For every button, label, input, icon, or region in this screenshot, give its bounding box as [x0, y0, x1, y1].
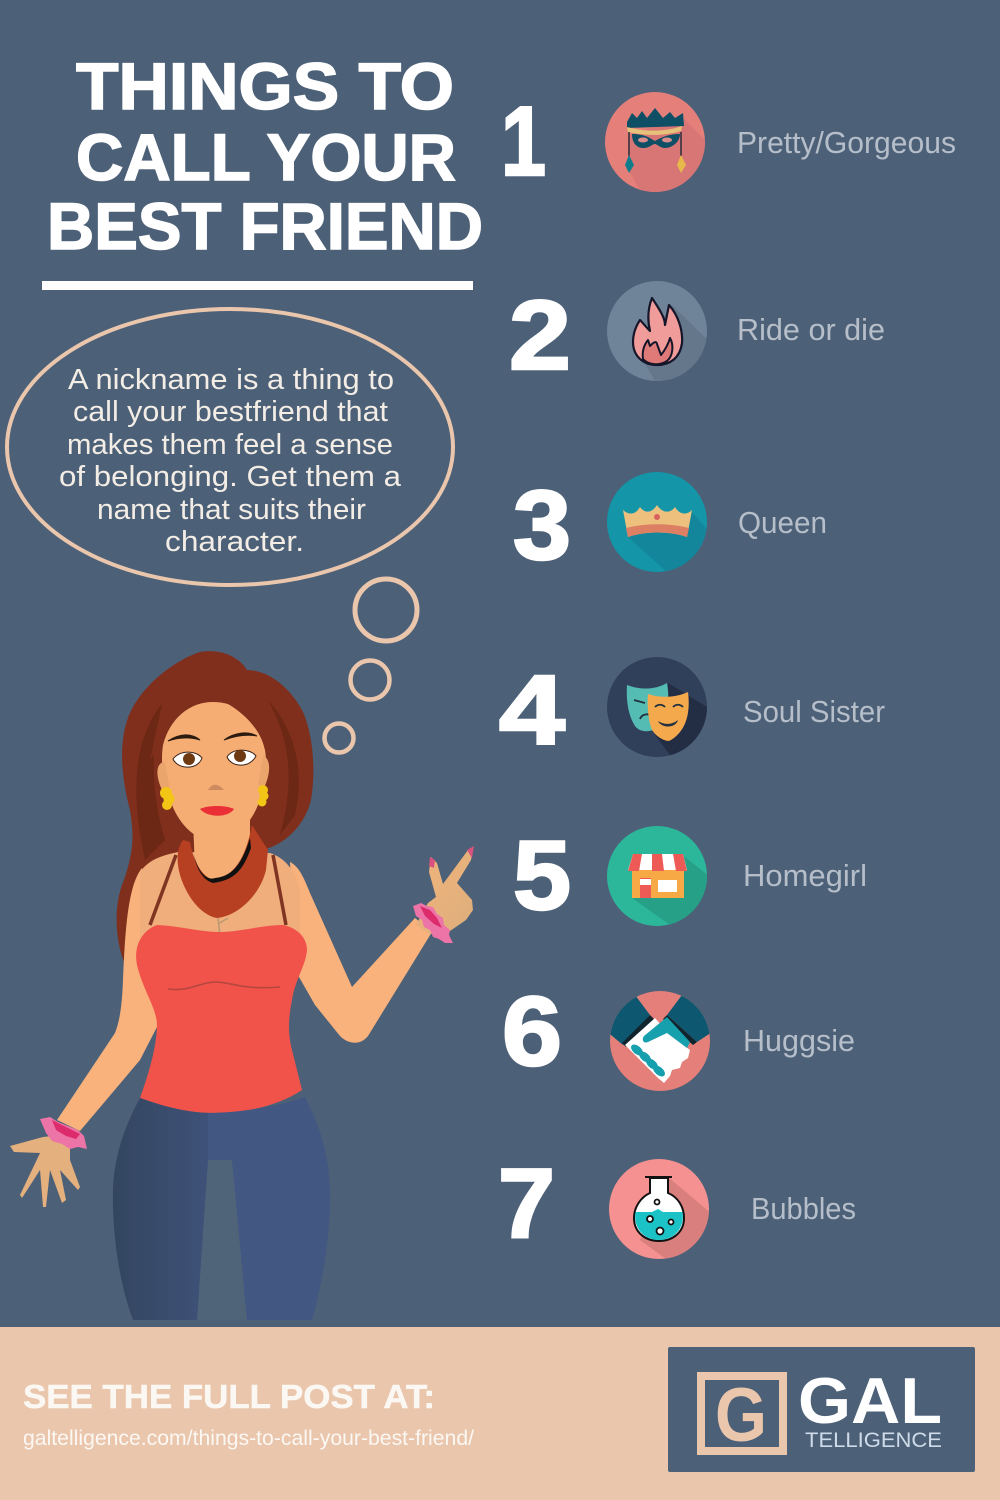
icon: flask: [609, 1159, 709, 1259]
label: Pretty/Gorgeous: [737, 125, 956, 160]
item 3: [514, 472, 826, 572]
left hand: [10, 1135, 80, 1207]
item 5: 5: [513, 820, 571, 930]
item 2: [511, 281, 884, 381]
label: Ride or die: [737, 312, 885, 347]
logo: [668, 1347, 975, 1472]
brows: [168, 733, 257, 741]
neck: [193, 820, 250, 885]
leg gap: [197, 1160, 247, 1320]
right arm: [290, 862, 432, 1043]
right hand: [416, 848, 473, 934]
scrunchie right: [413, 903, 453, 943]
item 3: 3: [513, 470, 571, 580]
straps: [150, 855, 286, 925]
title: THINGS TO: [76, 49, 454, 123]
pants: [113, 1098, 213, 1320]
title underline: [42, 281, 473, 290]
item 4: [499, 657, 885, 757]
icon: shop: [607, 826, 707, 926]
icon: flame: [607, 281, 707, 381]
item 4: 4: [499, 655, 565, 765]
label: Bubbles: [751, 1191, 856, 1226]
footer url: galtelligence.com/things-to-call-your-best-friend/: [23, 1427, 474, 1450]
logo: GAL: [798, 1364, 942, 1437]
left arm: [57, 868, 158, 1131]
label: Soul Sister: [743, 694, 885, 729]
item 6: 6: [502, 976, 562, 1086]
thought bubble with intro text: A nickname is a thing to: [68, 364, 394, 396]
top: [136, 925, 307, 1113]
logo: G: [715, 1373, 767, 1458]
icon: masquerade mask: [605, 92, 705, 192]
scrunchie left: [40, 1117, 87, 1149]
item 2: 2: [509, 280, 571, 390]
thought bubble with intro text: makes them feel a sense: [67, 429, 393, 461]
scarf: [178, 825, 268, 918]
thought bubble trail: [324, 579, 417, 752]
title: [47, 49, 483, 263]
logo: TELLIGENCE: [805, 1429, 942, 1452]
item 7: [501, 1159, 855, 1259]
icon: handshake: [605, 991, 715, 1091]
earrings: [160, 785, 268, 810]
item 6: [504, 991, 854, 1091]
item 5: [513, 820, 867, 930]
face: [162, 702, 266, 841]
nose: [208, 785, 224, 790]
thought bubble with intro text: call your bestfriend that: [73, 396, 388, 428]
ears: [157, 755, 269, 790]
footer heading: SEE THE FULL POST AT:: [23, 1378, 435, 1415]
lips: [200, 806, 234, 816]
icon: crown: [607, 472, 707, 572]
thought bubble with intro text: [7, 309, 453, 585]
fringe: [150, 680, 275, 760]
item 1: 1: [501, 86, 546, 196]
eyes: [173, 752, 202, 767]
hair: [117, 651, 313, 965]
icon: theatre masks: [607, 657, 707, 757]
necklace: [218, 918, 228, 945]
torso skin: [140, 852, 300, 940]
footer band: [0, 1327, 1000, 1500]
thought bubble with intro text: of belonging. Get them a: [59, 461, 402, 493]
item 7: 7: [498, 1148, 555, 1258]
nails right: [429, 846, 474, 868]
title: CALL YOUR: [76, 120, 456, 194]
label: Homegirl: [743, 858, 867, 893]
top seam: [168, 982, 280, 990]
label: Queen: [738, 505, 827, 540]
label: Huggsie: [743, 1023, 855, 1058]
thought bubble with intro text: name that suits their: [97, 494, 366, 526]
item 1: [505, 92, 955, 192]
thought bubble with intro text: character.: [165, 526, 304, 558]
title: BEST FRIEND: [47, 189, 483, 263]
illustration: woman pointing: [10, 651, 474, 1320]
